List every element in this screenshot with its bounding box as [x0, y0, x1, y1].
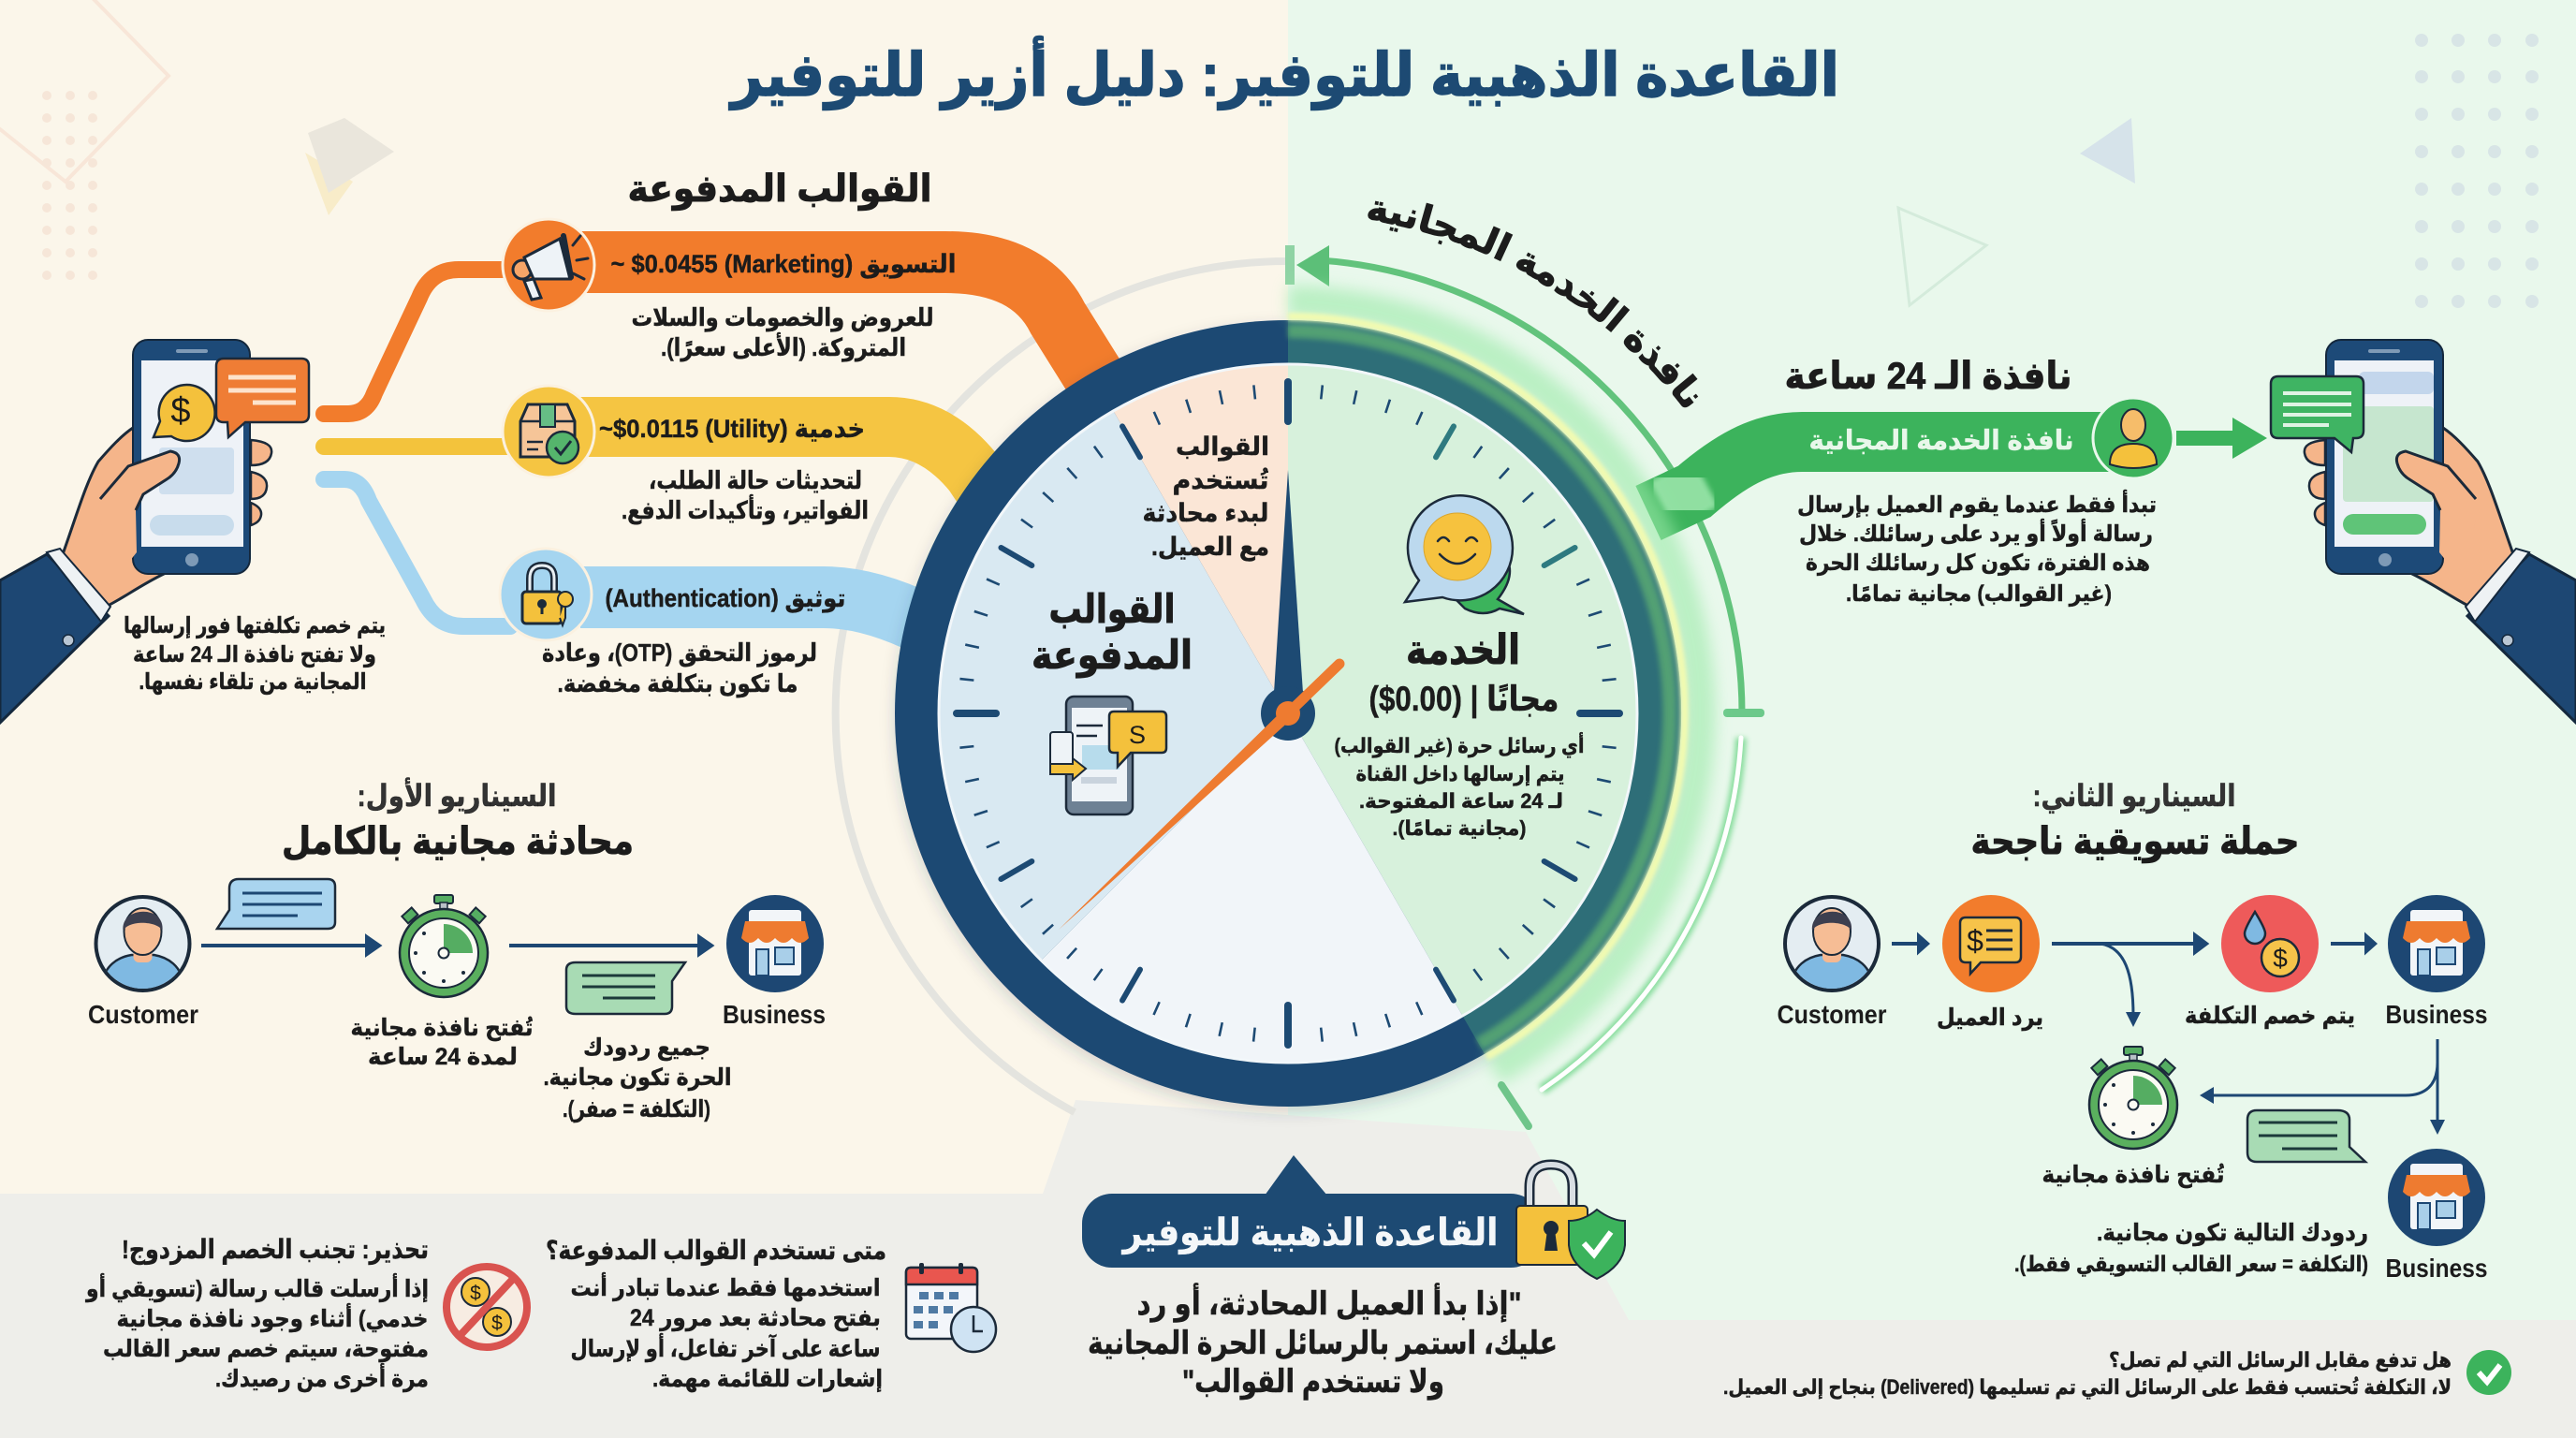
panel: warning double charge [84, 1235, 527, 1393]
heading: 24 hour window: نافذة الـ 24 ساعة [1784, 356, 2072, 397]
decoration: top left shapes [0, 0, 394, 280]
icon: customer replies [1942, 895, 2040, 992]
text: next replies free: (التكلفة = سعر القالب التسويقي فقط). [2014, 1252, 2368, 1277]
heading: warning: تحذير: تجنب الخصم المزدوج! [122, 1235, 429, 1266]
icon: coin bubble: $ [170, 391, 191, 431]
icon: no double charge: $ [470, 1283, 481, 1304]
band highlight [1662, 482, 1705, 506]
icon: no double charge [446, 1267, 527, 1347]
text: left caption: المجانية من تلقاء نفسها. [139, 669, 367, 695]
text: left caption [124, 613, 386, 695]
arrow: free window arc [1285, 245, 1764, 717]
text: when to use body: إشعارات للقائمة مهمة. [652, 1366, 883, 1393]
background: bottom grey band [0, 1100, 2576, 1438]
label: window opens: تُفتح نافذة مجانية [2042, 1162, 2224, 1189]
label: customer: Customer [1777, 1000, 1887, 1029]
decoration: top right shapes [1898, 34, 2539, 308]
text: clock business initiated: مع العميل. [1151, 533, 1269, 562]
glow arcs around clock [1288, 301, 1741, 1126]
icon: parcel [503, 386, 594, 477]
band: utility [580, 427, 992, 501]
text: clock business initiated: لبدء محادثة [1142, 499, 1269, 527]
text: window description: تبدأ فقط عندما يقوم العميل بإرسال [1797, 490, 2157, 518]
icon: charge deducted [2221, 895, 2319, 992]
text: clock business initiated: القوالب [1176, 433, 1269, 462]
band: marketing [580, 262, 1105, 393]
panel: golden rule [1082, 1155, 1625, 1401]
text: utility description: لتحديثات حالة الطلب، [649, 466, 862, 494]
text: clock service free: أي رسائل حرة (غير القوالب) [1335, 731, 1584, 758]
text: marketing description: للعروض والخصومات والسلات [631, 303, 934, 332]
label: charge deducted: يتم خصم التكلفة [2185, 1003, 2355, 1029]
label: free service window: نافذة الخدمة المجانية [1808, 426, 2074, 456]
text: clock business initiated [1142, 433, 1269, 562]
text: when to use body: بفتح محادثة بعد مرور 24 [630, 1305, 881, 1332]
icon: megaphone [503, 219, 594, 311]
heading: scenario one: السيناريو الأول: [358, 777, 556, 814]
text: window description [1797, 490, 2157, 607]
text: window opens: تُفتح نافذة مجانية [350, 1015, 534, 1042]
icon: phone with paid template: S [1129, 721, 1146, 749]
ring: green tint [1288, 343, 1659, 1034]
text: undelivered question: هل تدفع مقابل الرسائل التي لم تصل؟ [2109, 1348, 2452, 1372]
sector: business initiated [1113, 363, 1288, 713]
text: clock paid templates [1032, 587, 1193, 679]
text: clock paid templates: القوالب [1048, 587, 1176, 633]
text: window description: (غير القوالب) مجانية تمامًا. [1846, 581, 2112, 607]
phone body [133, 340, 250, 574]
band: free service window [1648, 442, 2117, 513]
icon: stopwatch [2089, 1047, 2177, 1149]
heading: scenario two: حملة تسويقية ناجحة [1971, 821, 2299, 863]
text: clock service free [1335, 627, 1584, 840]
label: business: Business [2385, 1254, 2488, 1283]
icon: business [2388, 895, 2485, 992]
text: replies free [543, 1034, 732, 1123]
illustration: left hand holding phone [0, 340, 309, 723]
arrow [2331, 936, 2375, 951]
icon: padlock and key [500, 549, 592, 640]
background: right mint half [1288, 0, 2576, 1438]
label: authentication: توثيق (Authentication) [605, 584, 846, 613]
curved heading: free service window: نافذة الخدمة المجانية [1368, 200, 1698, 408]
heading: paid templates: القوالب المدفوعة [627, 169, 932, 211]
connector: blue [324, 479, 510, 626]
icon: coin bubble [154, 385, 215, 441]
arrow [201, 937, 379, 954]
icon: green reply bubble [566, 962, 685, 1014]
icon: orange message bubble [216, 359, 309, 437]
text: window description: هذه الفترة، تكون كل رسائلك الحرة [1806, 550, 2150, 576]
icon: calendar and clock [906, 1263, 996, 1352]
text: replies free: (التكلفة = صفر). [563, 1096, 710, 1123]
text: replies free: جميع ردودك [583, 1034, 710, 1062]
banner: golden rule [1082, 1155, 1541, 1268]
icon: lock with shield [1516, 1165, 1625, 1279]
text: clock service free: الخدمة [1406, 627, 1520, 673]
heading: scenario one: محادثة مجانية بالكامل [282, 821, 634, 862]
text: authentication description: لرموز التحقق (OTP)، وعادة [542, 638, 817, 668]
text: clock business initiated: تُستخدم [1172, 466, 1269, 495]
text: warning body [84, 1273, 429, 1393]
text: clock service free: (مجانية تمامًا). [1393, 816, 1526, 840]
connector: orange [324, 270, 510, 414]
text: window opens: لمدة 24 ساعة [368, 1044, 518, 1070]
text: left caption: يتم خصم تكلفتها فور إرسالها [124, 613, 386, 638]
text: clock service free: مجانًا |‏ ($0.00) [1368, 680, 1559, 719]
icon: customer badge [2093, 398, 2174, 478]
icon: no double charge: $ [491, 1313, 503, 1334]
text: warning body: إذا أرسلت قالب رسالة (تسويقي أو [84, 1273, 429, 1303]
minute hand [1059, 709, 1293, 930]
arrow: to phone [2176, 418, 2267, 459]
arrow: back to stopwatch [2200, 1063, 2437, 1104]
text: authentication description [542, 638, 817, 698]
banner: golden rule: القاعدة الذهبية للتوفير [1121, 1212, 1498, 1255]
sector: neutral [1041, 713, 1463, 1064]
panel: undelivered messages [1723, 1348, 2511, 1400]
text: marketing description: المتروكة. (الأعلى سعرًا). [661, 332, 906, 362]
icon: smiling chat bubbles [1405, 495, 1524, 614]
icon: check [2466, 1350, 2511, 1395]
panel: scenario two [1777, 779, 2488, 1283]
icon: customer replies: $ [1967, 924, 1983, 958]
panel: when to use paid templates [546, 1236, 996, 1393]
text: left caption: ولا تفتح نافذة الـ 24 ساعة [133, 642, 376, 668]
label: business: Business [723, 1000, 826, 1029]
text: utility description [622, 466, 869, 525]
background: left cream half [0, 0, 1288, 1438]
text: warning body: مفتوحة، سيتم خصم سعر القالب [103, 1336, 429, 1363]
text: clock service free: لـ 24 ساعة المفتوحة. [1359, 789, 1563, 814]
title: القاعدة الذهبية للتوفير: دليل أزير للتوفير [728, 36, 1839, 110]
icon: stopwatch [400, 895, 488, 997]
clock hands [1059, 470, 1339, 930]
text: clock service free: يتم إرسالها داخل القناة [1355, 762, 1565, 786]
text: replies free: الحرة تكون مجانية. [543, 1064, 732, 1092]
text: window opens [350, 1015, 534, 1070]
label: customer replies: يرد العميل [1937, 1005, 2043, 1032]
label: customer: Customer [88, 1000, 198, 1029]
sector: paid templates [938, 410, 1288, 961]
text: window description: رسالة أولاً أو يرد على رسائلك. خلال [1799, 519, 2153, 547]
illustration: right hand holding phone [2271, 340, 2576, 723]
text: clock paid templates: المدفوعة [1032, 633, 1193, 679]
clock [895, 320, 1681, 1107]
text: golden rule quote: ولا تستخدم القوالب" [1182, 1364, 1444, 1401]
icon: charge deducted: $ [2273, 944, 2288, 973]
text: when to use body: ساعة على آخر تفاعل، أو لإرسال [571, 1333, 880, 1363]
icon: business [726, 895, 824, 992]
heading: scenario two [1971, 779, 2299, 863]
arrow: branch to stopwatch [2100, 944, 2141, 1027]
label: business: Business [2385, 1000, 2488, 1029]
icon: blue bubble [217, 879, 335, 929]
text: next replies free: ردودك التالية تكون مجانية. [2097, 1220, 2368, 1247]
icon: customer [1785, 897, 1879, 990]
arrow [2052, 935, 2206, 952]
grey outer ring [836, 261, 1288, 1112]
text: when to use body: استخدمها فقط عندما تبادر أنت [571, 1272, 880, 1302]
label: marketing price: التسويق (Marketing)‏ $0.0455 ~ [610, 250, 957, 279]
text: undelivered answer: لا، التكلفة تُحتسب فقط على الرسائل التي تم تسليمها (Delivered) بنجاح إلى العميل. [1723, 1375, 2452, 1400]
arrow: down to business [2430, 1039, 2445, 1135]
text: authentication description: ما تكون بتكلفة مخفضة. [558, 669, 798, 698]
sector: service free [1288, 363, 1638, 1017]
icon: phone with paid template [1050, 697, 1166, 814]
text: golden rule quote: عليك، استمر بالرسائل الحرة المجانية [1088, 1326, 1558, 1362]
connector: yellow [324, 438, 510, 455]
text: warning body: مرة أخرى من رصيدك. [215, 1363, 429, 1393]
icon: green reply bubble [2247, 1110, 2365, 1162]
label: utility price: خدمية (Utility)‏ $0.0115~ [599, 415, 865, 443]
text: utility description: الفواتير، وتأكيدات الدفع. [622, 494, 869, 525]
hour hand [1274, 470, 1303, 693]
heading: scenario one [282, 777, 634, 862]
text: golden rule quote [1088, 1283, 1558, 1401]
icon: green message bubble [2271, 376, 2364, 452]
arrow [1892, 936, 1927, 951]
heading: scenario two: السيناريو الثاني: [2033, 779, 2235, 814]
text: when to use body [571, 1272, 883, 1393]
text: warning body: خدمي) أثناء وجود نافذة مجانية [116, 1303, 429, 1333]
clock outer ring [895, 320, 1681, 1107]
icon: business [2388, 1149, 2485, 1246]
text: marketing description [631, 303, 934, 362]
icon: customer [95, 897, 189, 990]
heading: when to use: متى تستخدم القوالب المدفوعة؟ [546, 1236, 886, 1266]
arrow [509, 937, 711, 954]
panel: scenario one [88, 777, 826, 1123]
panel: paid templates [324, 169, 1105, 698]
band: authentication [580, 597, 927, 625]
text: golden rule quote: "إذا بدأ العميل المحادثة، أو رد [1136, 1283, 1522, 1323]
text: next replies free [2014, 1220, 2368, 1277]
